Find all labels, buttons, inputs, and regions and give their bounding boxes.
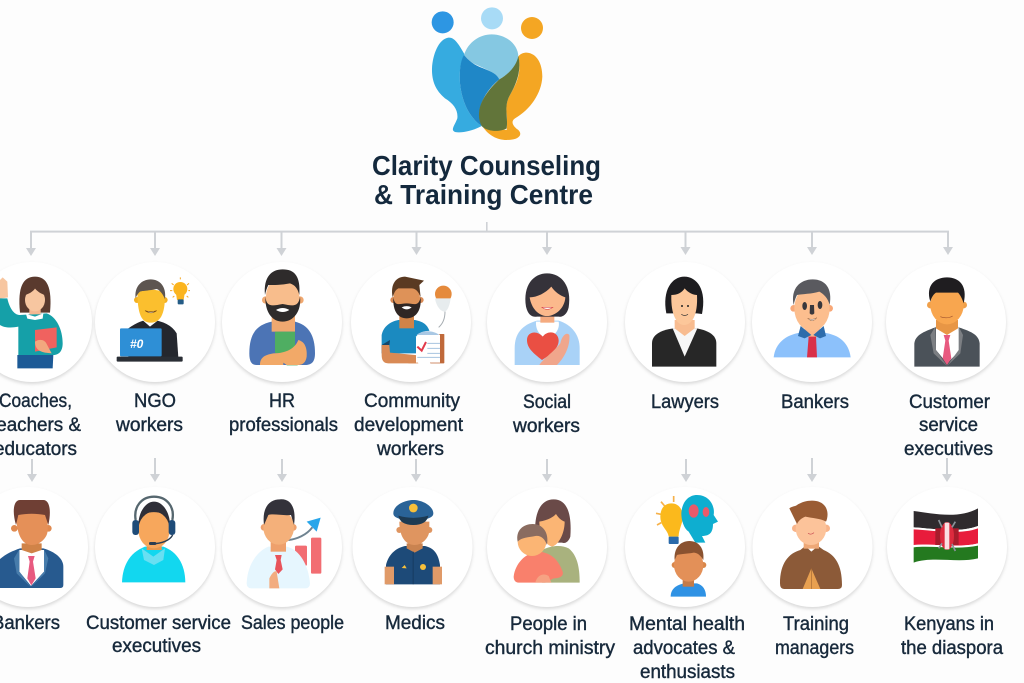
label: enthusiasts — [640, 662, 735, 683]
label — [0, 391, 81, 460]
label: Mental health — [629, 614, 745, 635]
label — [904, 392, 993, 460]
panel: lawyers — [625, 262, 745, 413]
panel: mental health advocates and enthusiasts — [625, 487, 745, 683]
panel: bankers — [752, 262, 872, 413]
label — [512, 392, 580, 437]
label: Customer — [909, 392, 991, 413]
panel: NGO workers — [95, 262, 215, 436]
label: Social — [523, 392, 571, 413]
label: the diaspora — [901, 638, 1003, 659]
label: Community — [364, 391, 460, 412]
label: workers — [115, 415, 183, 436]
label: NGO — [134, 391, 176, 412]
panel: customer service executives — [886, 262, 1006, 460]
label — [354, 391, 464, 460]
icon: teacher — [0, 277, 63, 368]
label: workers — [376, 439, 444, 460]
title: & Training Centre — [374, 179, 593, 210]
label: service — [919, 415, 978, 436]
icon: Kenyan flag — [914, 508, 978, 563]
icon: banker in blue shirt — [774, 279, 851, 357]
label: Medics — [385, 613, 445, 634]
label — [775, 614, 854, 659]
panel: customer service executives, second row — [86, 487, 231, 657]
label — [115, 391, 183, 436]
label: advocates & — [633, 638, 735, 659]
icon: executive in grey suit — [914, 277, 980, 367]
title — [372, 150, 601, 210]
panel: Kenyans in the diaspora — [887, 487, 1007, 659]
panel: coaches, teachers and educators — [0, 262, 92, 460]
label: executives — [904, 439, 993, 460]
label: development — [354, 415, 464, 436]
icon: community worker — [382, 277, 452, 363]
label: Kenyans in — [904, 614, 994, 635]
icon: NGO worker with laptop — [117, 277, 190, 362]
icon: agent with headset — [122, 497, 185, 582]
label: managers — [775, 638, 854, 659]
label — [229, 391, 338, 436]
connector arrows: top row — [26, 222, 953, 256]
panel: training managers — [752, 487, 872, 659]
panel: social workers — [487, 262, 607, 437]
label — [901, 614, 1003, 659]
icon: bulb, head and boy — [656, 495, 718, 597]
icon: HR professional — [249, 269, 315, 365]
connector arrows: bottom row — [27, 458, 952, 482]
icon: NGO worker with laptop: #0 — [130, 337, 144, 351]
label: Sales people — [241, 613, 344, 634]
panel: HR professionals — [222, 262, 342, 436]
icon: salesperson with chart — [247, 499, 321, 588]
panel: people in church ministry — [485, 487, 616, 659]
icon: social worker with heart — [515, 273, 580, 365]
panel: bankers, second row — [0, 487, 88, 634]
icon: training manager — [780, 501, 842, 589]
icon: banker in blue suit — [0, 500, 63, 588]
label: People in — [510, 614, 587, 635]
icon: uniformed medic — [385, 500, 442, 584]
label: executives — [112, 636, 201, 657]
label — [485, 614, 616, 659]
icon: mother and child — [514, 499, 580, 583]
panel: sales people — [222, 487, 344, 634]
label: church ministry — [485, 638, 616, 659]
label: Coaches, — [0, 391, 72, 412]
logo — [432, 7, 543, 140]
panel: community development workers — [351, 262, 471, 460]
title: Clarity Counseling — [372, 150, 601, 181]
label: Customer service — [86, 613, 231, 634]
label: Lawyers — [651, 392, 719, 413]
label: workers — [512, 416, 580, 437]
label: Training — [783, 614, 849, 635]
icon: lawyer — [652, 277, 716, 367]
label: professionals — [229, 415, 338, 436]
label — [86, 613, 231, 657]
label — [629, 614, 745, 683]
panel: medics — [352, 487, 472, 634]
label: Bankers — [781, 392, 849, 413]
label: HR — [269, 391, 295, 412]
